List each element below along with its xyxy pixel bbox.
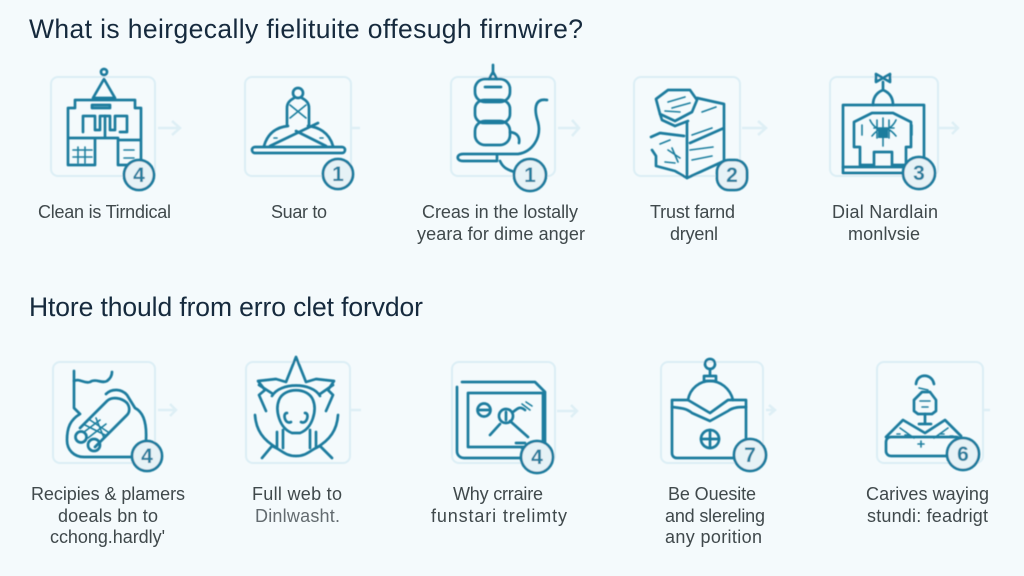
icon frame [661, 362, 763, 463]
panel: bottom item 5, device on tray [877, 362, 990, 470]
icon frame [51, 77, 155, 176]
label: and slereling [665, 506, 765, 526]
panel: top item 4, folded map [634, 77, 766, 190]
arrow [557, 405, 577, 417]
icon frame [830, 77, 938, 176]
arrow [558, 120, 579, 136]
icon frame [246, 362, 350, 463]
label: Dinlwasht. [255, 506, 340, 526]
label [252, 484, 342, 526]
number badge: 1 [332, 163, 344, 186]
number badge: 4 [531, 446, 543, 469]
arrow [351, 409, 361, 411]
icon frame [452, 362, 555, 463]
icon: building [68, 69, 141, 165]
label: monlvsie [848, 224, 920, 244]
icon frame [245, 77, 351, 176]
label: Suar to [271, 202, 327, 222]
icon: framed dome [843, 74, 924, 173]
label: Why crraire [453, 484, 543, 504]
icon: crowned face [255, 357, 338, 458]
arrow [158, 404, 176, 416]
panel: top item 3, bottle and hose [451, 65, 579, 191]
panel: bottom item 3, framed screen [452, 362, 577, 473]
label [866, 484, 989, 526]
number badge: 2 [726, 164, 738, 187]
icon frame [877, 362, 983, 463]
panel: bottom item 1, scroll in cloud [53, 362, 176, 471]
label [832, 202, 938, 244]
title: second section heading: Htore thould from erro clet forvdor [29, 292, 423, 322]
icon frame [634, 77, 740, 176]
number badge: 3 [913, 162, 925, 185]
label: Full web to [252, 484, 342, 504]
label: stundi: feadrigt [867, 506, 988, 526]
title: first section heading: What is heirgecally fielituite offesugh firnwire? [29, 14, 583, 44]
icon: scroll in cloud [67, 371, 146, 457]
arrow [158, 121, 180, 135]
label [665, 484, 765, 547]
panel: bottom item 2, crowned face [246, 357, 361, 463]
icon: framed screen [457, 382, 545, 458]
number badge: 6 [957, 443, 969, 466]
arrow [742, 121, 766, 135]
label: funstari trelimty [431, 506, 567, 526]
label: yeara for dime anger [417, 224, 585, 244]
number badge: 4 [133, 164, 145, 187]
label [417, 202, 585, 244]
label: Clean is Tirndical [38, 202, 171, 222]
icon frame [451, 77, 555, 176]
icon: seated figure [252, 88, 345, 153]
label: Be Ouesite [668, 484, 756, 504]
label: any porition [665, 527, 762, 547]
icon: pouch with dome [672, 359, 746, 458]
label: Dial Nardlain [832, 202, 938, 222]
arrow [352, 127, 360, 129]
panel: bottom item 4, pouch with dome [661, 359, 775, 471]
icon frame [53, 362, 155, 463]
arrow [939, 122, 958, 134]
label: doeals bn to [58, 506, 158, 526]
label [31, 484, 185, 547]
number badge: 7 [744, 444, 756, 467]
panel: top item 5, framed dome [830, 74, 958, 189]
panel: top item 2, figure on base [245, 77, 360, 189]
icon: device on tray [886, 376, 961, 456]
number badge: 4 [141, 445, 153, 468]
label: Creas in the lostally [422, 202, 578, 222]
label: dryenl [670, 224, 718, 244]
number badge: 1 [524, 164, 536, 187]
label: Carives waying [866, 484, 989, 504]
label: cchong.hardly' [50, 527, 165, 547]
label [650, 202, 735, 244]
arrow [766, 405, 775, 415]
icon: bottle and hose [458, 65, 547, 172]
label: Trust farnd [650, 202, 735, 222]
icon: folded map [651, 90, 724, 178]
label: Recipies & plamers [31, 484, 185, 504]
arrow [984, 409, 990, 411]
panel: top item 1, building [51, 69, 180, 190]
label [431, 484, 567, 526]
